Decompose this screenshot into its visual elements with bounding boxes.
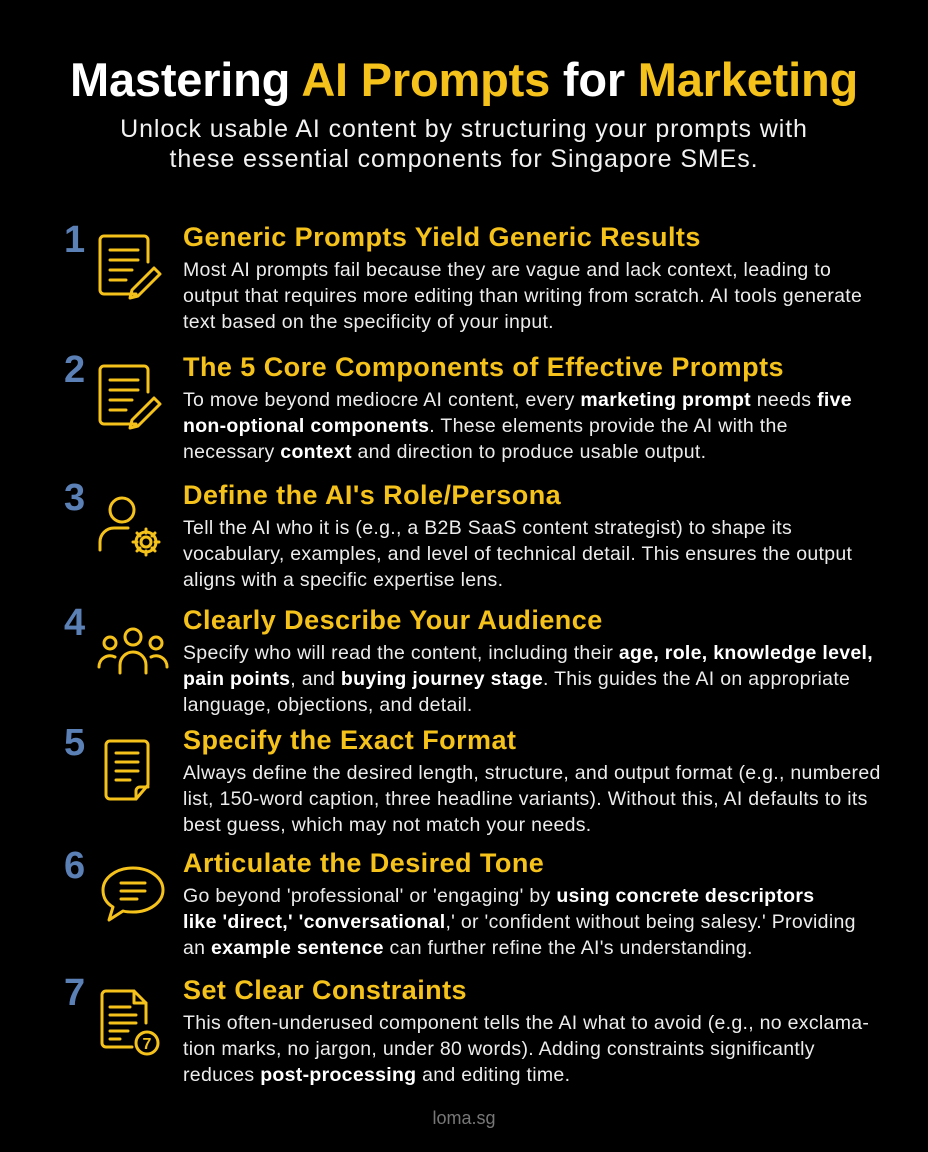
footer: loma.sg xyxy=(432,1108,496,1128)
body 6 xyxy=(183,885,856,959)
number 2: 2 xyxy=(64,349,85,391)
number 7: 7 xyxy=(64,972,85,1014)
body 5: list, 150-word caption, three headline variants). Without this, AI defaults to its xyxy=(183,788,868,810)
body 7 xyxy=(183,1012,869,1086)
icon: group xyxy=(98,628,168,674)
number 5: 5 xyxy=(64,722,85,764)
body 5: Always define the desired length, structure, and output format (e.g., numbered xyxy=(183,762,881,784)
body 3: aligns with a specific expertise lens. xyxy=(183,569,503,591)
number 4: 4 xyxy=(64,602,85,644)
number 1: 1 xyxy=(64,219,85,261)
body 2 xyxy=(183,389,852,463)
subtitle xyxy=(120,115,808,173)
body 7: reduces post-processing and editing time. xyxy=(183,1064,570,1086)
number 3: 3 xyxy=(64,477,85,519)
icon: person gear xyxy=(98,496,160,556)
section 5 xyxy=(64,722,881,836)
heading 6: Articulate the Desired Tone xyxy=(183,848,544,878)
heading 7: Set Clear Constraints xyxy=(183,975,467,1005)
body 6: like 'direct,' 'conversational,' or 'confident without being salesy.' Providing xyxy=(183,911,856,933)
icon: document pencil xyxy=(98,364,162,430)
subtitle: Unlock usable AI content by structuring your prompts with xyxy=(120,115,808,143)
heading 3: Define the AI's Role/Persona xyxy=(183,480,561,510)
section 4 xyxy=(64,602,873,716)
body 5: best guess, which may not match your needs. xyxy=(183,814,592,836)
heading 2: The 5 Core Components of Effective Prompts xyxy=(183,352,784,382)
icon: document with 7 xyxy=(100,990,160,1056)
body 1: output that requires more editing than writing from scratch. AI tools generate xyxy=(183,285,862,307)
section 1 xyxy=(64,219,862,333)
body 7: This often-underused component tells the AI what to avoid (e.g., no exclama- xyxy=(183,1012,869,1034)
body 2: non-optional components. These elements provide the AI with the xyxy=(183,415,788,437)
body 1 xyxy=(183,259,862,333)
body 7: tion marks, no jargon, under 80 words). Adding constraints significantly xyxy=(183,1038,815,1060)
section 7 xyxy=(64,972,869,1086)
section 3 xyxy=(64,477,852,591)
body 1: Most AI prompts fail because they are vague and lack context, leading to xyxy=(183,259,831,281)
icon: document pencil xyxy=(98,234,162,300)
number 6: 6 xyxy=(64,845,85,887)
icon: speech bubble xyxy=(102,866,164,922)
heading 5: Specify the Exact Format xyxy=(183,725,516,755)
body 3: vocabulary, examples, and level of technical detail. This ensures the output xyxy=(183,543,852,565)
body 1: text based on the specificity of your input. xyxy=(183,311,554,333)
body 5 xyxy=(183,762,881,836)
body 2: necessary context and direction to produce usable output. xyxy=(183,441,706,463)
icon: document xyxy=(104,740,150,800)
section 6 xyxy=(64,845,856,959)
body 4: Specify who will read the content, including their age, role, knowledge level, xyxy=(183,642,873,664)
body 2: To move beyond mediocre AI content, every marketing prompt needs five xyxy=(183,389,852,411)
icon: document with 7: 7 xyxy=(143,1036,152,1053)
title: Mastering AI Prompts for Marketing xyxy=(70,53,858,106)
body 4: language, objections, and detail. xyxy=(183,694,473,716)
body 4 xyxy=(183,642,873,716)
body 4: pain points, and buying journey stage. This guides the AI on appropriate xyxy=(183,668,850,690)
body 6: an example sentence can further refine the AI's understanding. xyxy=(183,937,753,959)
body 3 xyxy=(183,517,852,591)
heading 1: Generic Prompts Yield Generic Results xyxy=(183,222,701,252)
section 2 xyxy=(64,349,852,463)
heading 4: Clearly Describe Your Audience xyxy=(183,605,603,635)
subtitle: these essential components for Singapore SMEs. xyxy=(170,145,758,173)
body 6: Go beyond 'professional' or 'engaging' by using concrete descriptors xyxy=(183,885,814,907)
body 3: Tell the AI who it is (e.g., a B2B SaaS content strategist) to shape its xyxy=(183,517,792,539)
